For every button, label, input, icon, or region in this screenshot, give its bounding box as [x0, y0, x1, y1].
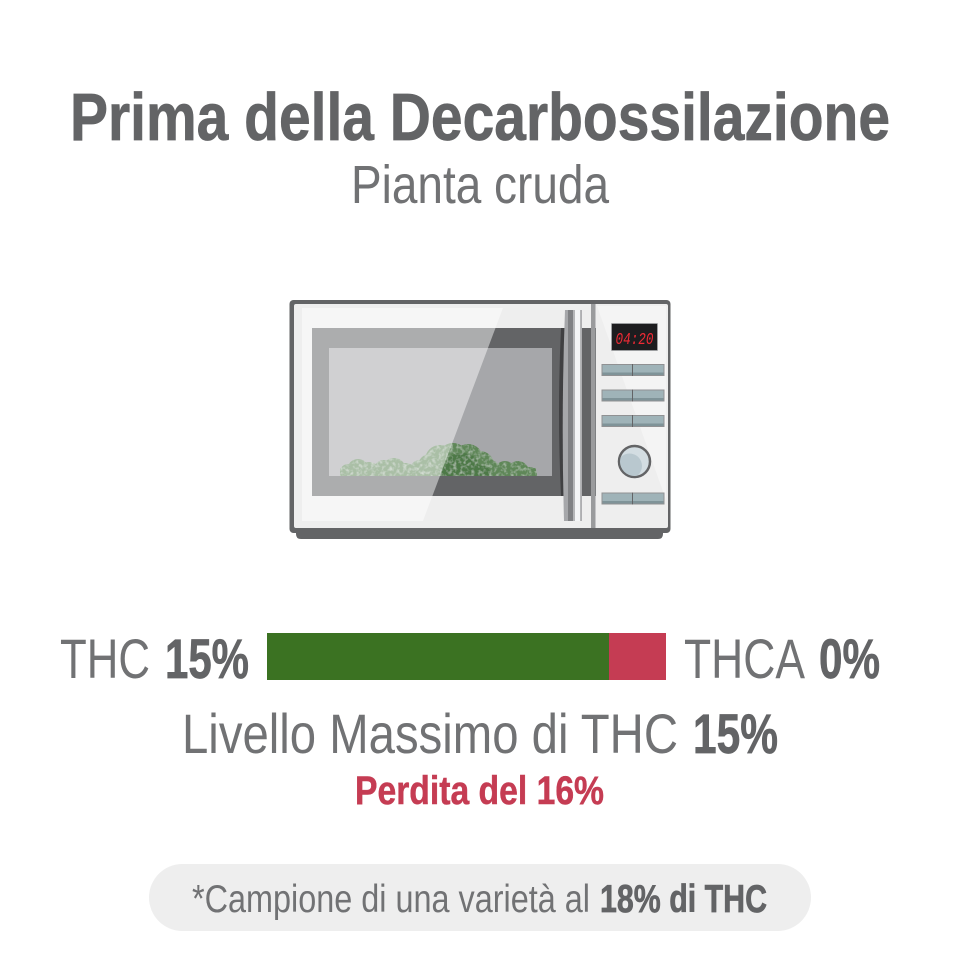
cannabis buds: [340, 443, 537, 476]
footnote pill: *Campione di una varietà al: [192, 878, 590, 921]
dial: [617, 446, 650, 478]
clock display: 04:20: [616, 331, 654, 350]
label: THC: 15%: [165, 627, 249, 690]
label: THCA: THCA: [684, 627, 806, 690]
footnote pill: [149, 864, 811, 931]
microwave body: [294, 304, 668, 528]
button row 4: [602, 492, 664, 504]
window glass: [329, 348, 552, 476]
door handle: [563, 310, 582, 521]
divider strip: [591, 304, 596, 528]
button row 3: [602, 415, 664, 427]
door handle shadow: [559, 328, 576, 496]
clock display: [612, 324, 658, 350]
stacked bar: [267, 633, 666, 680]
max THC level: 15%: [693, 702, 778, 765]
button row 1: [602, 364, 664, 376]
loss callout: Perdita del 16%: [355, 769, 604, 813]
glass reflection: [302, 308, 503, 521]
footnote pill: 18% di THC: [600, 878, 767, 921]
microwave foot: [296, 530, 663, 539]
label: THC: THC: [60, 627, 150, 690]
max THC level: Livello Massimo di THC: [182, 702, 678, 765]
subtitle: Pianta cruda: [351, 155, 610, 215]
label: THCA: 0%: [819, 627, 880, 690]
control panel reflection: [597, 306, 666, 500]
label: THC: [60, 627, 249, 690]
window frame: [312, 328, 596, 496]
icon: microwave: [290, 300, 670, 539]
button row 2: [602, 390, 664, 402]
microwave casing: [290, 300, 670, 533]
